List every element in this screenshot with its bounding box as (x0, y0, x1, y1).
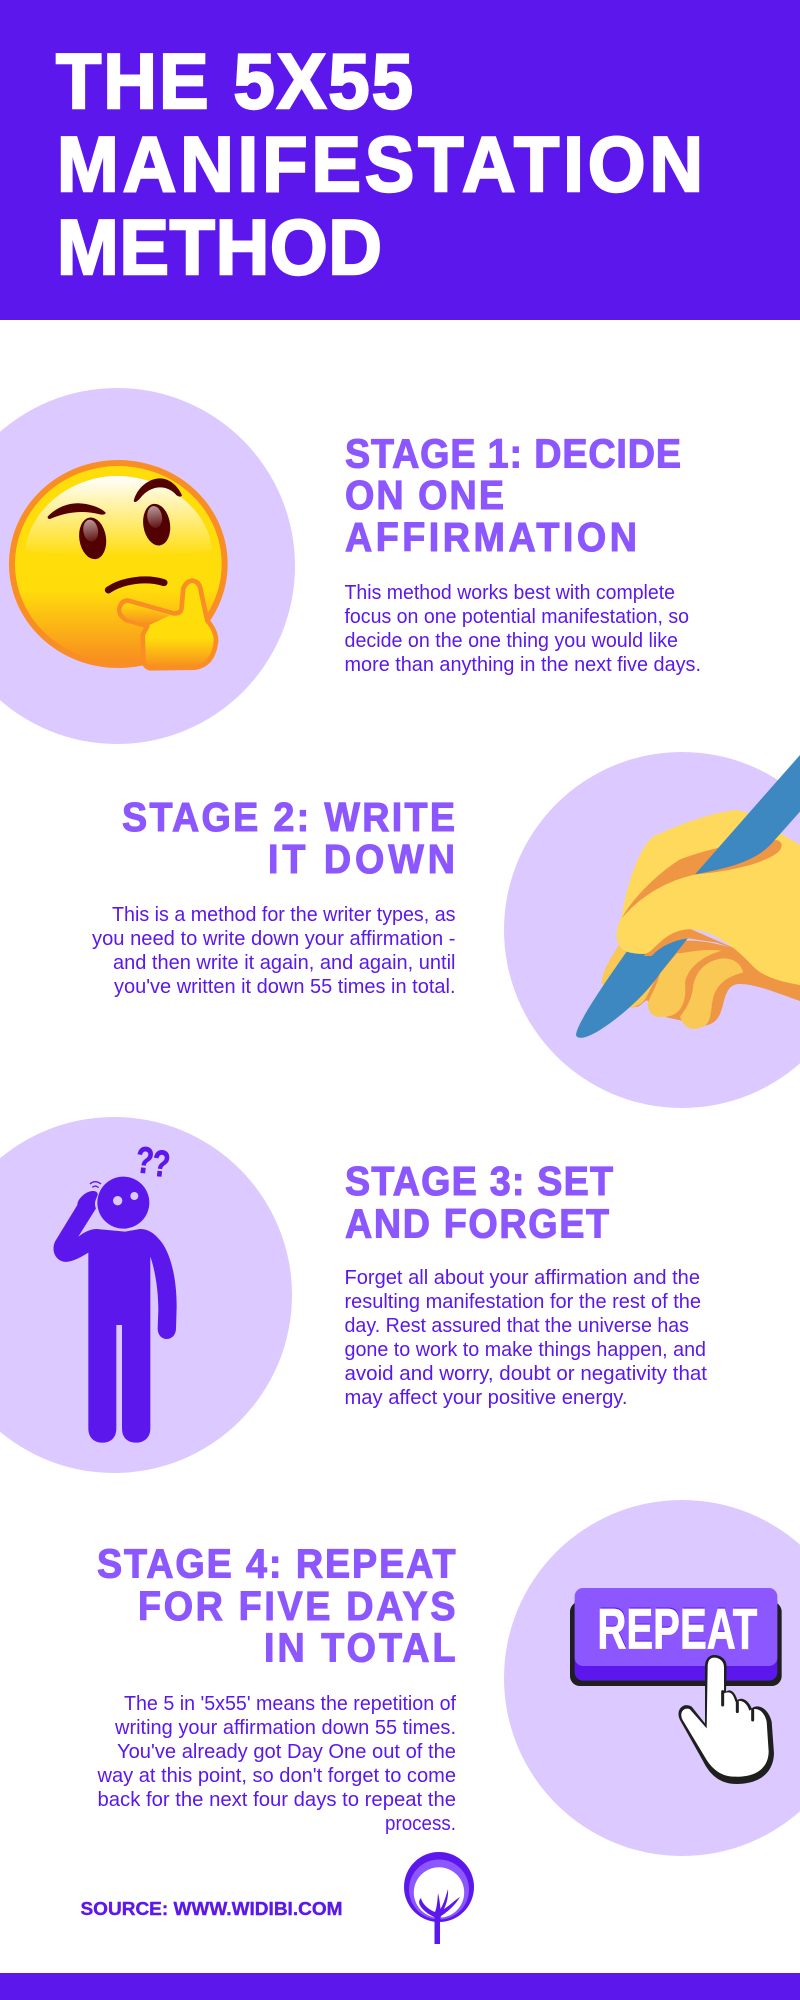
title: THE 5X55 (56, 38, 413, 125)
stage 2 heading: STAGE 2: WRITE (122, 795, 455, 840)
stage 2 body text: you've written it down 55 times in total. (114, 976, 456, 998)
icon: tree logo (404, 1852, 474, 1944)
panel: stage 4 (96, 1500, 800, 1856)
stage 3 heading (345, 1159, 613, 1247)
stage 4 heading (97, 1541, 456, 1671)
stage 1 body text (344, 582, 701, 676)
stage 4 body text: You've already got Day One out of the (117, 1741, 456, 1763)
stage 4 body text: writing your affirmation down 55 times. (114, 1717, 456, 1739)
stage 1 heading: ON ONE (345, 473, 504, 518)
stage 3 heading: AND FORGET (345, 1201, 609, 1247)
stage 1 heading: STAGE 1: DECIDE (345, 431, 681, 477)
stage 4 circle (504, 1500, 800, 1856)
icon: hand writing with pen (576, 755, 800, 1038)
stage 2 body text: you need to write down your affirmation - (92, 928, 455, 950)
stage 2 circle (504, 752, 800, 1108)
panel: stage 3 (0, 1117, 707, 1473)
stage 1 heading (345, 431, 681, 560)
stage 2 heading: IT DOWN (268, 837, 455, 882)
icon: thinking face emoji (12, 463, 225, 668)
stage 1 body text: This method works best with complete (344, 582, 675, 604)
stage 1 body text: focus on one potential manifestation, so (344, 606, 689, 628)
icon: confused person scratching head: ? (134, 1140, 156, 1183)
stage 3 body text: Forget all about your affirmation and the (344, 1267, 700, 1289)
title (56, 38, 703, 291)
stage 3 heading: STAGE 3: SET (345, 1159, 613, 1204)
stage 4 body text: The 5 in '5x55' means the repetition of (124, 1693, 456, 1715)
stage 4 heading: STAGE 4: REPEAT (97, 1541, 456, 1587)
stage 3 circle (0, 1117, 292, 1473)
stage 3 body text: may affect your positive energy. (344, 1387, 628, 1409)
icon: confused person scratching head: ? (150, 1143, 172, 1186)
stage 1 body text: more than anything in the next five days. (344, 654, 701, 676)
stage 3 body text: day. Rest assured that the universe has (344, 1315, 689, 1337)
footer bar (0, 1973, 800, 2000)
stage 4 heading: IN TOTAL (264, 1625, 456, 1671)
stage 2 body text (92, 904, 456, 998)
stage 4 body text: way at this point, so don't forget to come (96, 1765, 456, 1787)
source credit: SOURCE: WWW.WIDIBI.COM (80, 1898, 342, 1919)
icon: repeat button with pointing hand (570, 1588, 782, 1784)
stage 2 body text: and then write it again, and again, until (113, 952, 455, 974)
icon: confused person scratching head (54, 1140, 177, 1443)
panel: stage 2 (92, 752, 800, 1108)
stage 1 body text: decide on the one thing you would like (344, 630, 678, 652)
header banner (0, 0, 800, 320)
title: METHOD (57, 204, 382, 291)
stage 3 body text (344, 1267, 707, 1409)
title: MANIFESTATION (57, 121, 703, 208)
stage 4 body text: process. (385, 1813, 456, 1835)
stage 3 body text: resulting manifestation for the rest of the (344, 1291, 701, 1313)
stage 1 heading: AFFIRMATION (345, 515, 637, 560)
stage 3 body text: gone to work to make things happen, and (344, 1339, 706, 1361)
stage 2 heading (122, 795, 455, 882)
stage 3 body text: avoid and worry, doubt or negativity that (344, 1363, 707, 1385)
stage 1 circle (0, 388, 295, 744)
stage 2 body text: This is a method for the writer types, as (112, 904, 456, 926)
panel: stage 1 (0, 388, 701, 744)
stage 4 body text: back for the next four days to repeat the (98, 1789, 456, 1811)
stage 4 body text (96, 1693, 456, 1835)
stage 4 heading: FOR FIVE DAYS (138, 1584, 455, 1629)
